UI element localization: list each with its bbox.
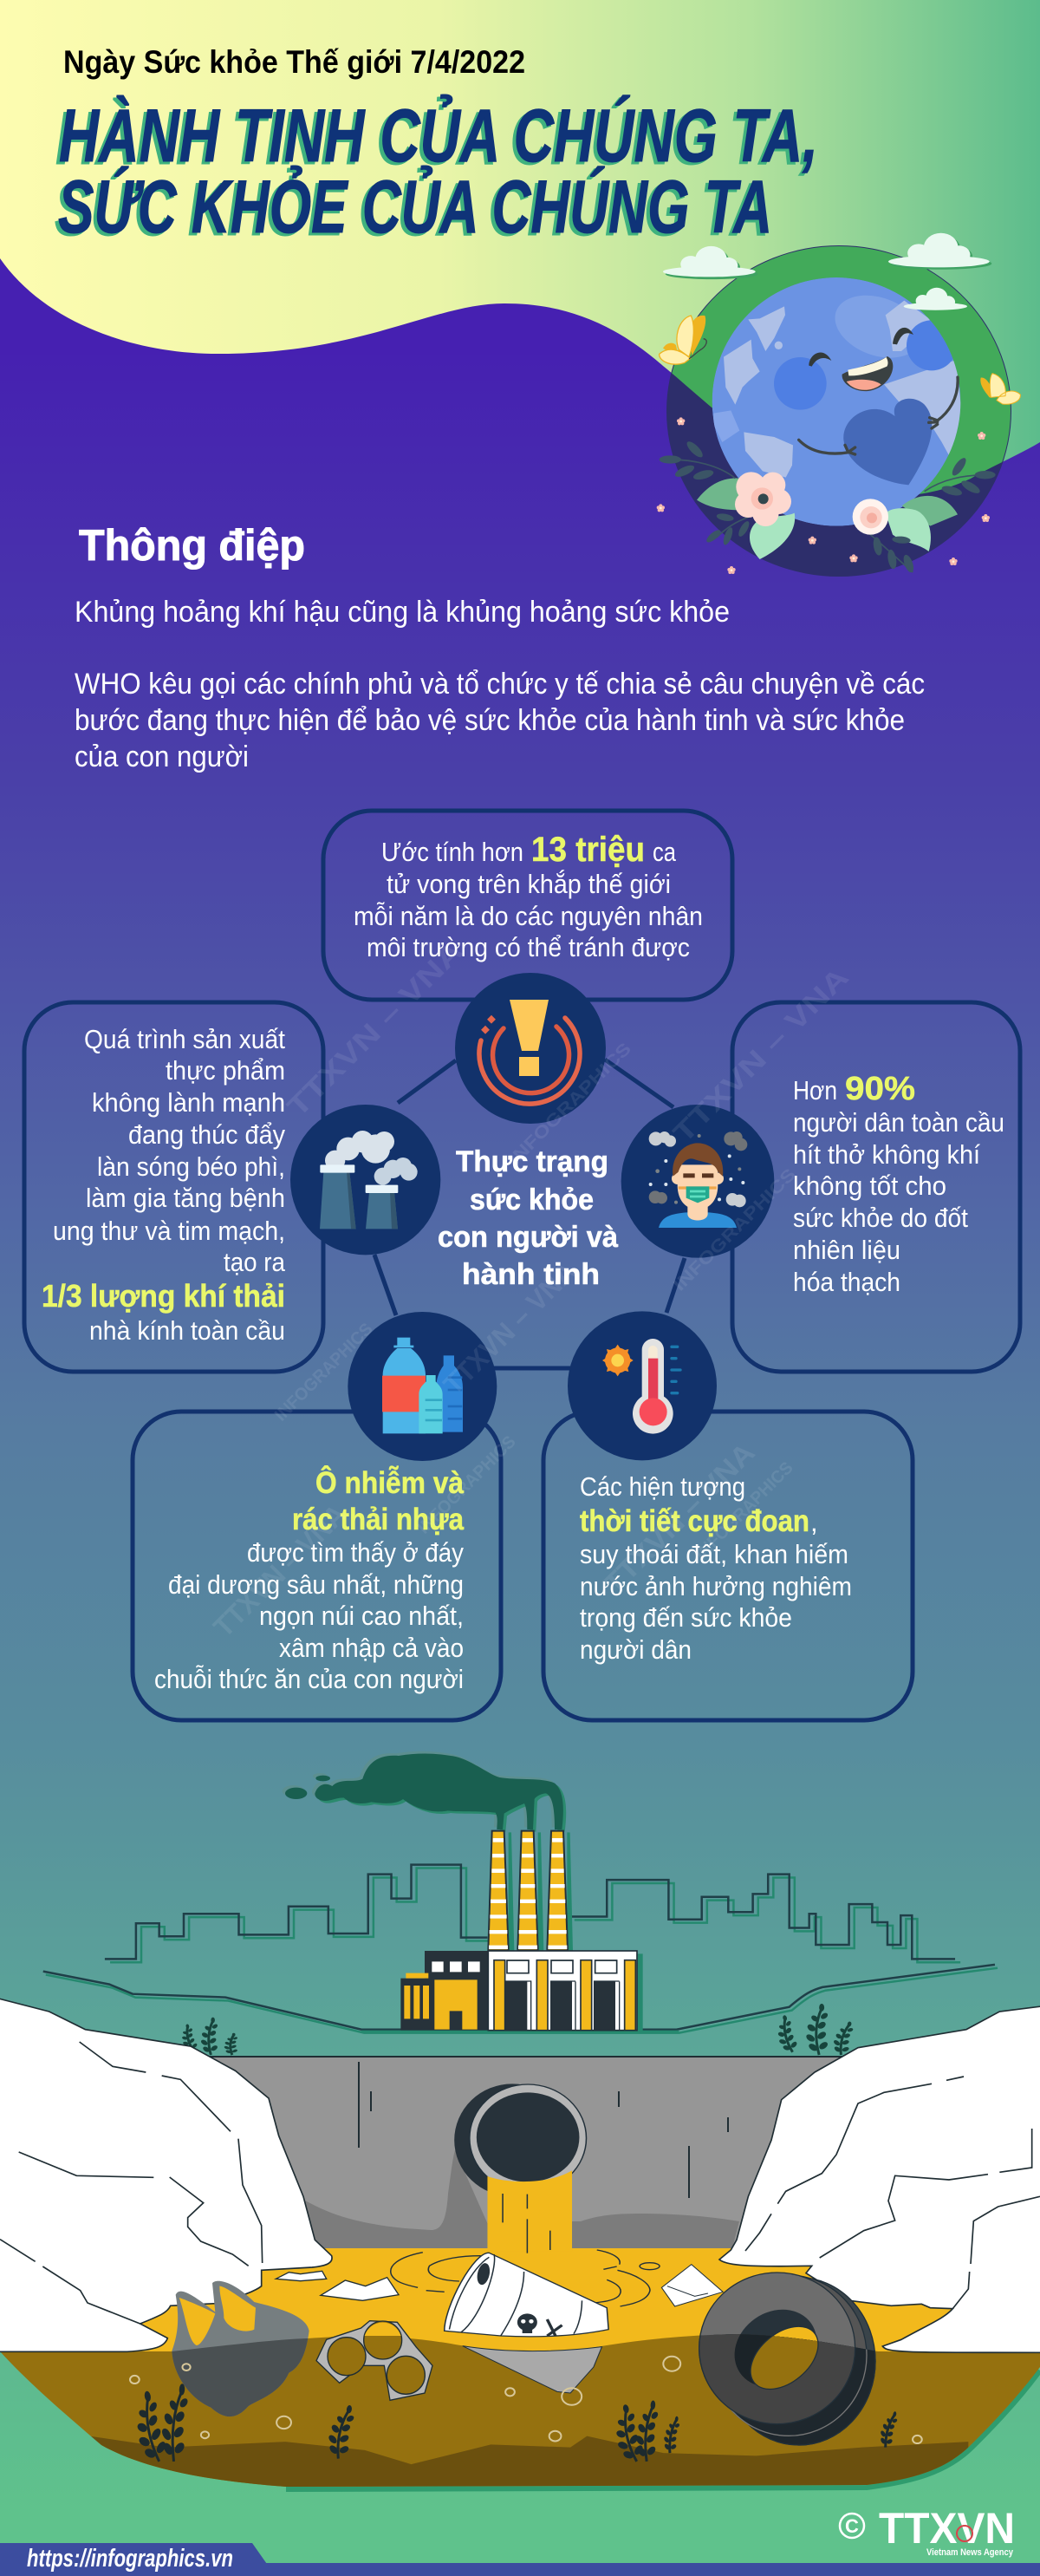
icon: rose [853,499,888,535]
icon: pink anemone flower [735,472,791,526]
panel: 90 percent polluted air: người dân toàn cầu [793,1107,1004,1138]
intro text: WHO kêu gọi các chính phủ và tổ chức y tế chia sẻ câu chuyện về các [75,668,925,701]
footer banner with URL [0,2543,1040,2576]
central heading: hành tinh [462,1258,600,1291]
panel: 90 percent polluted air: 90% [845,1071,915,1107]
title: SỨC KHỎE CỦA CHÚNG TA [58,166,772,249]
panel: extreme weather: Các hiện tượng [580,1471,745,1502]
watermarks: INFOGRAPHICS [271,1320,377,1425]
watermarks: TTXVN – VNA [207,1498,352,1643]
factory [361,1831,679,2033]
icon: clouds [663,233,991,310]
underwater plants [127,2381,900,2467]
panel: unhealthy food production: đang thúc đẩy [128,1119,285,1150]
panel: 90 percent polluted air [732,1002,1020,1372]
illustration: smiling earth with flowers [657,233,1020,577]
panel: 13 million deaths: môi trường có thể tránh được [367,932,690,962]
barrel submerged part [463,2346,601,2393]
hill line [43,1965,998,2033]
panel: unhealthy food production: 1/3 lượng khí thải [42,1278,285,1314]
panel: extreme weather: thời tiết cực đoan [580,1504,809,1538]
panel: plastic pollution: ngọn núi cao nhất, [259,1601,464,1631]
watermarks: INFOGRAPHICS [670,1165,800,1295]
central heading: Thực trạng [456,1145,608,1178]
icon: heart [843,399,932,485]
concrete wall [208,2057,845,2248]
panel: unhealthy food production: Quá trình sản xuất [84,1024,285,1054]
watermarks: TTXVN – VNA [281,936,469,1123]
heading: Thông điệp: Thông điệp [79,521,305,570]
icon: globe [712,277,962,526]
icon: factory chimneys [290,1105,440,1255]
plastic bag [172,2281,309,2416]
pentagon connector lines [374,1060,685,1368]
icon: small butterfly [980,374,1020,404]
panel: plastic pollution: Ô nhiễm và [315,1465,464,1500]
yellow water surface [87,2248,962,2357]
panel: extreme weather [543,1412,913,1720]
logo: TTXVN: C [845,2515,859,2537]
logo: TTXVN: Vietnam News Agency [926,2547,1014,2558]
watermarks: TTXVN – VNA [666,962,855,1149]
footer banner with URL: https://infographics.vn [27,2545,233,2573]
panel: plastic pollution: xâm nhập cả vào [279,1633,464,1663]
icon: large butterfly [660,316,706,364]
intro text: của con người [75,740,249,773]
tire [699,2273,875,2445]
panel: unhealthy food production: làn sóng béo phì, [97,1151,285,1182]
panel: unhealthy food production [24,1002,323,1372]
intro text: bước đang thực hiện để bảo vệ sức khỏe của hành tinh và sức khỏe [75,704,905,737]
panel: 90 percent polluted air: sức khỏe do đốt [793,1203,968,1233]
icon: plastic bottles [348,1312,497,1461]
panel: unhealthy food production: thực phẩm [166,1055,285,1086]
tire underwater shade [699,2334,876,2446]
plastic bag underwater [172,2338,309,2417]
panel: extreme weather: suy thoái đất, khan hiếm [580,1539,848,1569]
watermarks: INFOGRAPHICS [505,1040,635,1170]
icon: face [799,328,958,454]
central heading [438,1145,618,1291]
panel: 13 million deaths: tử vong trên khắp thế giới [387,869,671,899]
skyline outline [105,1865,960,1962]
panel: extreme weather: , [810,1507,818,1537]
icon: person wearing mask in smog [621,1105,774,1258]
drain pipe with waste stream and barrel [391,2084,723,2393]
barrel [445,2253,608,2337]
smoke [283,1751,566,1832]
logo: TTXVN [840,2504,1015,2558]
panel: 90 percent polluted air: nhiên liệu [793,1235,900,1265]
panel: 13 million deaths: Ước tính hơn [381,837,523,867]
watermarks: TTXVN – VNA [437,1255,582,1400]
panel: plastic pollution: đại dương sâu nhất, những [168,1569,464,1600]
panel: 90 percent polluted air: Hơn [793,1075,837,1105]
panel: unhealthy food production: tạo ra [224,1247,286,1277]
paper scrap [661,2265,723,2306]
icon: leaves and twigs [660,440,996,574]
panel: unhealthy food production: nhà kính toàn cầu [89,1315,285,1346]
header date line: Ngày Sức khỏe Thế giới 7/4/2022 [63,44,525,80]
white cliff right [719,2006,1040,2352]
watermarks: INFOGRAPHICS [692,1458,797,1564]
panel: extreme weather: người dân [580,1634,692,1665]
debris and can rings [276,2271,432,2400]
panel: plastic pollution: rác thải nhựa [292,1503,464,1536]
illustration: polluted landscape [0,1751,1040,2538]
panel: 13 million deaths: ca [653,837,677,867]
title [55,95,818,251]
panel: 90 percent polluted air: không tốt cho [793,1171,946,1201]
panel: extreme weather: trọng đến sức khỏe [580,1602,792,1633]
bubbles [130,2357,922,2443]
panel: 13 million deaths [323,811,732,1000]
panel: 90 percent polluted air: hít thở không khí [793,1139,980,1170]
panel: 13 million deaths: 13 triệu [531,831,645,869]
panel: plastic pollution: được tìm thấy ở đáy [247,1537,464,1568]
panel: plastic pollution: chuỗi thức ăn của con người [154,1664,464,1694]
central heading: sức khỏe [470,1184,594,1216]
panel: unhealthy food production: làm gia tăng bệnh [86,1183,285,1213]
watermarks [207,936,855,1643]
panel: plastic pollution [133,1412,501,1720]
central heading: con người và [438,1221,618,1254]
panel: 13 million deaths: mỗi năm là do các nguyên nhân [354,901,703,931]
panel: extreme weather: nước ảnh hưởng nghiêm [580,1571,852,1601]
white cliff left [0,1999,332,2351]
watermarks: INFOGRAPHICS [414,1432,520,1538]
panel: 90 percent polluted air: hóa thạch [793,1267,900,1297]
icon: thermometer and sun [568,1311,717,1460]
underwater and sediment [1,2336,1040,2492]
watermarks: TTXVN – VNA [597,1437,761,1600]
icons: small pink blossoms [657,417,990,574]
icon: warning exclamation [455,973,606,1124]
header wave [0,0,1040,496]
logo: TTXVN: TTXVN [879,2504,1015,2553]
plants on the bank [177,2004,855,2056]
panel: unhealthy food production: không lành mạnh [92,1087,285,1118]
title: SỨC KHỎE CỦA CHÚNG TA [55,168,769,251]
panel: unhealthy food production: ung thư và tim mạch, [53,1216,285,1246]
intro text [75,596,925,773]
intro text: Khủng hoảng khí hậu cũng là khủng hoảng sức khỏe [75,596,730,629]
